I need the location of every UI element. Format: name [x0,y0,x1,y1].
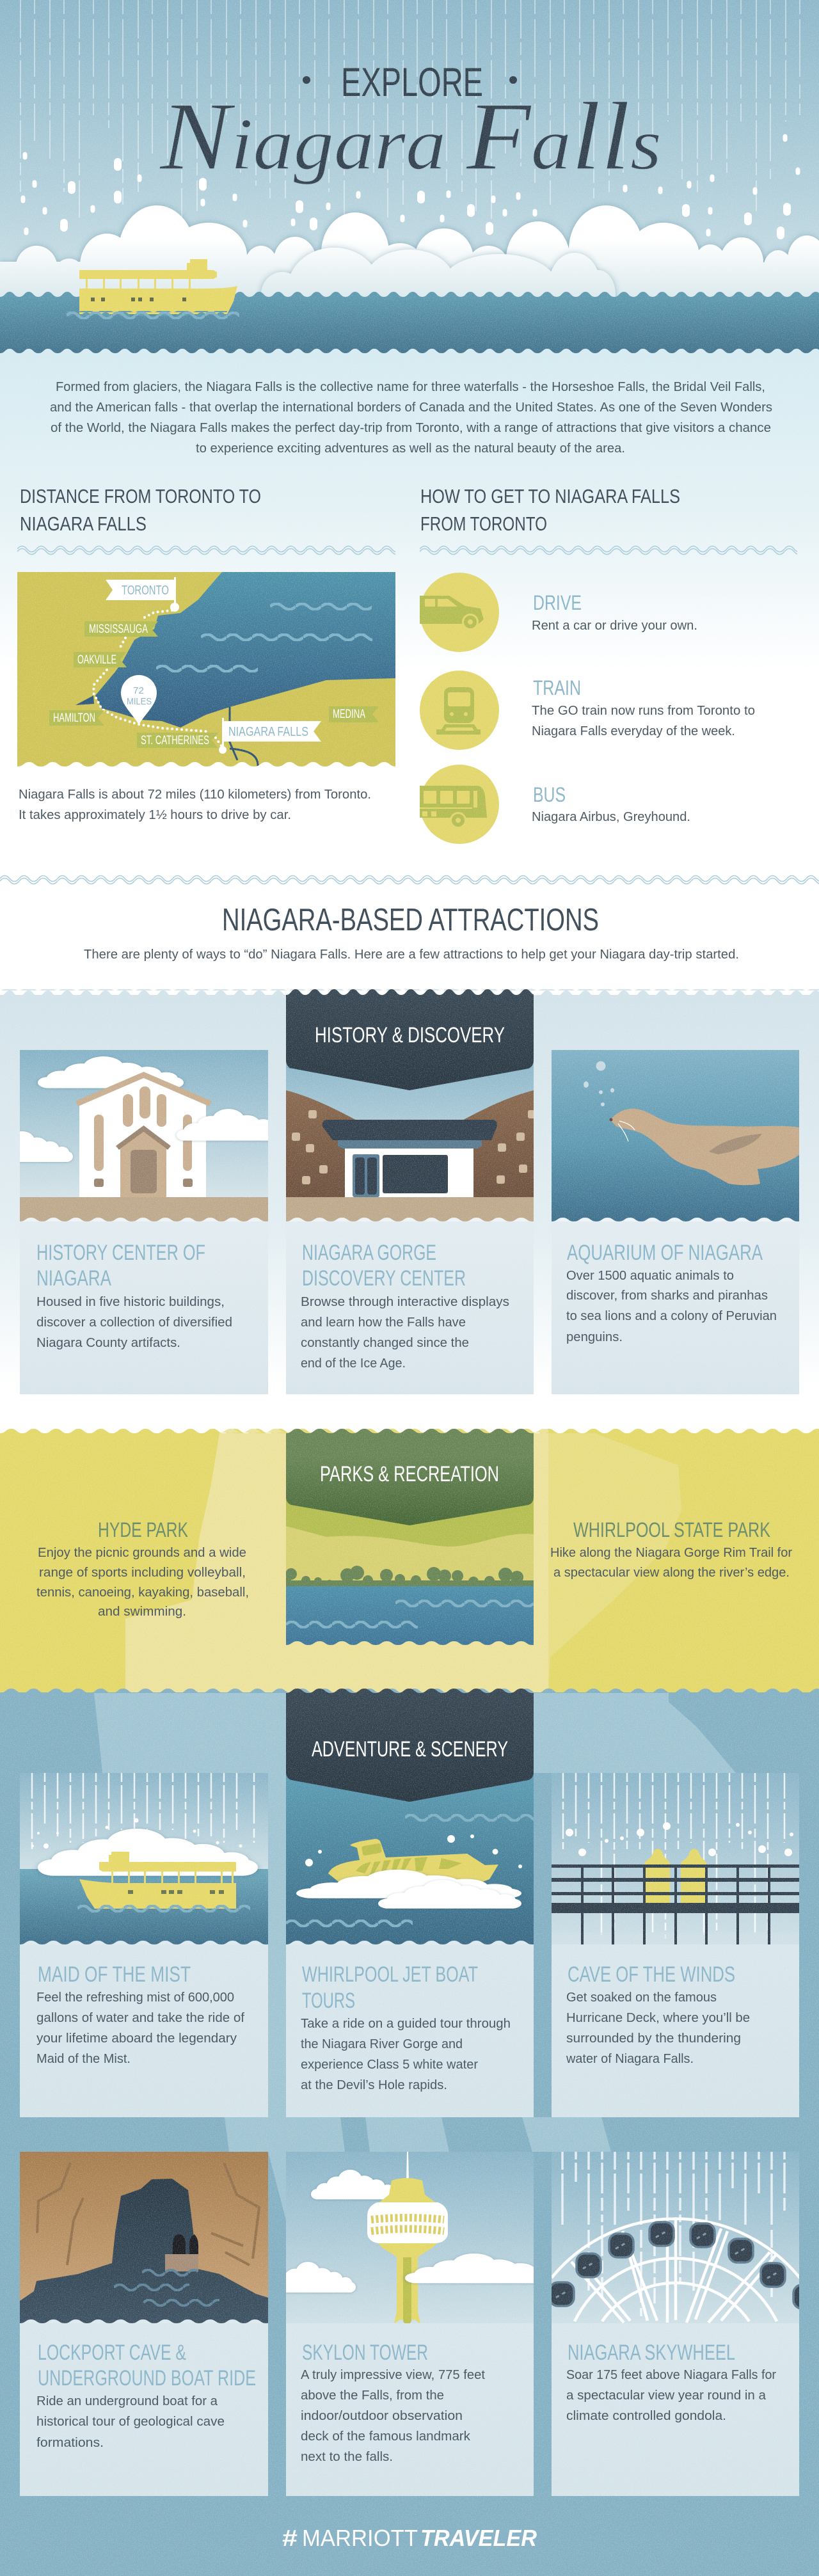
transport: train: Niagara Falls everyday of the week. [532,724,735,738]
illustration: discovery center [286,1050,536,1221]
title: Niagara Falls script: Niagara Falls [159,83,662,190]
card: Aquarium of Niagara [552,1050,799,1394]
flag: Niagara Falls [219,718,321,754]
heading: WHIRLPOOL JET BOAT [302,1962,478,1987]
description [566,1991,750,2066]
description [301,2017,511,2092]
description [36,2394,225,2450]
description: Feel the refreshing mist of 600,000 [36,1991,234,2005]
heading: Niagara-based attractions: NIAGARA-BASED ATTRACTIONS [222,903,599,937]
transport: bus: BUS [533,783,566,806]
transport: train: The GO train now runs from Toronto to [532,704,755,718]
transport: drive [420,573,697,652]
heading: how to get to Niagara Falls: HOW TO GET TO NIAGARA FALLS [420,485,680,507]
map caption [19,788,371,822]
description: penguins. [566,1330,623,1344]
description: above the Falls, from the [301,2389,444,2403]
icon: car [420,573,499,652]
description: end of the Ice Age. [301,1356,406,1371]
card: Maid of the Mist [20,1773,268,2117]
transport: train [420,671,755,750]
description: A truly impressive view, 775 feet [301,2368,485,2382]
map pin: 72 miles: 72 [133,685,144,696]
transport: train: TRAIN [533,676,581,699]
map pin: 72 miles: MILES [127,696,152,707]
icon: yellow ferry boat [67,259,239,319]
description: your lifetime aboard the legendary [36,2031,237,2046]
description: deck of the famous landmark [301,2429,471,2444]
description: the Niagara River Gorge and [301,2037,463,2051]
card: Niagara SkyWheel [550,2152,818,2496]
transport: bus [420,765,690,844]
heading: distance from Toronto: NIAGARA FALLS [20,513,147,535]
heading: distance from Toronto: DISTANCE FROM TORONTO TO [20,485,261,507]
label: St. Catherines [137,733,218,748]
description: Niagara County artifacts. [36,1336,180,1350]
text: Hyde Park: and swimming. [98,1605,186,1619]
description: Maid of the Mist. [36,2052,131,2066]
description: Over 1500 aquatic animals to [566,1269,734,1283]
illustration: ferris wheel [550,2152,818,2323]
illustration: tower [269,2152,559,2324]
heading: AQUARIUM OF NIAGARA [567,1241,763,1265]
heading: CAVE OF THE WINDS [568,1962,735,1987]
section: parks and recreation [0,1429,819,1693]
description: a spectacular view year round in a [566,2389,767,2403]
description [566,1269,777,1344]
flag: Niagara Falls: NIAGARA FALLS [228,725,308,739]
section: adventure and scenery [0,1689,819,2576]
description: and learn how the Falls have [301,1316,466,1330]
panel: route map [17,572,395,767]
card: History Center of Niagara [20,1050,268,1394]
transport: bus: Niagara Airbus, Greyhound. [532,810,690,824]
description: discover, from sharks and piranhas [566,1289,768,1303]
description: Housed in five historic buildings, [36,1295,225,1309]
clouds [0,205,819,301]
card: Whirlpool Jet Boat Tours [286,1689,534,2117]
description: to sea lions and a colony of Peruvian [566,1309,777,1323]
heading [302,1962,478,2013]
icon: train [420,671,499,750]
intro paragraph: of the World, the Niagara Falls makes the perfect day-trip from Toronto, with a range of attractions that give visitors a chance [51,421,771,435]
label: Hamilton [49,710,104,726]
illustration: maid of the mist [20,1773,268,1944]
label: St. Catherines: ST. CATHERINES [141,734,209,747]
water band [0,292,819,353]
illustration: hurricane deck [552,1773,799,1944]
label: Oakville: OAKVILLE [77,653,116,667]
footer hashtag: # [282,2525,298,2551]
banner: parks and recreation [286,1429,534,1525]
banner: adventure and scenery [286,1689,534,1802]
snow dots [23,136,798,235]
heading: SKYLON TOWER [302,2341,428,2365]
banner: history and discovery [286,989,534,1090]
heading: UNDERGROUND BOAT RIDE [38,2366,256,2390]
map caption: Niagara Falls is about 72 miles (110 kilometers) from Toronto. [19,788,371,802]
text: Hyde Park: HYDE PARK [98,1518,188,1541]
heading: HISTORY CENTER OF [36,1241,205,1265]
heading: NIAGARA [36,1266,111,1291]
description: indoor/outdoor observation [301,2409,463,2423]
banner: history and discovery: HISTORY & DISCOVERY [315,1023,505,1047]
description: next to the falls. [301,2450,393,2464]
label: Hamilton: HAMILTON [53,712,95,725]
illustration: jet boat [286,1773,534,1944]
text: Hyde Park: tennis, canoeing, kayaking, baseball, [36,1586,249,1600]
text: Whirlpool State Park [550,1518,792,1580]
description: experience Class 5 white water [301,2058,478,2072]
heading: distance from Toronto [17,485,395,555]
intro paragraph [50,380,772,456]
label: Mississauga [84,621,158,637]
text: Whirlpool State Park: a spectacular view along the river’s edge. [553,1566,790,1580]
description: constantly changed since the [301,1336,469,1350]
text: Whirlpool State Park: WHIRLPOOL STATE PARK [573,1518,770,1541]
description: Hurricane Deck, where you’ll be [566,2011,750,2025]
title: explore: EXPLORE [341,60,483,105]
description [301,1295,509,1371]
card: Niagara Gorge Discovery Center [286,989,536,1394]
map caption: It takes approximately 1½ hours to drive by car. [19,808,291,822]
description: Get soaked on the famous [566,1991,717,2005]
transport: drive: Rent a car or drive your own. [532,619,697,633]
footer hashtag: MARRIOTT [302,2525,418,2551]
description [301,2368,485,2464]
description: water of Niagara Falls. [566,2052,694,2066]
banner: adventure and scenery: ADVENTURE & SCENERY [312,1737,508,1761]
label: Mississauga: MISSISSAUGA [89,623,148,636]
flag: Toronto: TORONTO [122,584,169,598]
heading: LOCKPORT CAVE & [38,2341,186,2365]
card: Skylon Tower [269,2152,559,2496]
illustration: history center [20,1050,268,1221]
map pin: 72 miles [121,675,157,725]
description: historical tour of geological cave [36,2415,225,2429]
description [36,1991,244,2066]
heading [36,1241,205,1291]
description: surrounded by the thundering [566,2031,741,2046]
label: Medina: MEDINA [333,708,365,721]
heading: how to get to Niagara Falls [420,485,797,555]
heading: MAID OF THE MIST [38,1962,191,1987]
heading: DISCOVERY CENTER [302,1266,466,1291]
description: gallons of water and take the ride of [36,2011,244,2025]
banner: parks and recreation: PARKS & RECREATION [320,1462,499,1486]
card: Cave of the Winds [552,1773,799,2117]
header panel [0,0,819,672]
heading: TOURS [302,1989,355,2013]
text: Hyde Park: range of sports including volleyball, [39,1566,246,1580]
description: formations. [36,2436,104,2450]
heading: NIAGARA GORGE [302,1241,436,1265]
intro paragraph: Formed from glaciers, the Niagara Falls is the collective name for three waterfalls - the Horseshoe Falls, the Bridal Veil Falls, [56,380,765,394]
intro paragraph: and the American falls - that overlap the international borders of Canada and the United States. As one of the Seven Wonders [50,401,772,415]
footer hashtag [282,2525,537,2551]
icon: bus [420,765,499,844]
description: Browse through interactive displays [301,1295,509,1309]
intro paragraph: to experience exciting adventures as well as the natural beauty of the area. [196,441,625,456]
attractions intro: There are plenty of ways to “do” Niagara Falls. Here are a few attractions to help get your Niagara day-trip started. [84,948,739,962]
description: at the Devil’s Hole rapids. [301,2078,447,2092]
transport: drive: DRIVE [533,591,582,614]
text: Hyde Park [36,1518,249,1619]
card: Lockport Cave [20,2152,268,2496]
heading [38,2341,256,2390]
section: history and discovery [0,989,819,1430]
description: climate controlled gondola. [566,2409,726,2423]
description [36,1295,232,1350]
footer hashtag: TRAVELER [420,2525,537,2551]
heading [302,1241,466,1291]
heading: NIAGARA SKYWHEEL [568,2341,735,2365]
flag: Toronto [106,577,179,612]
description: Soar 175 feet above Niagara Falls for [566,2368,776,2382]
illustration: cave [20,2152,268,2323]
illustration: sea lion [552,1050,799,1221]
illustration: park landscape [285,1497,534,1645]
text: Whirlpool State Park: Hike along the Niagara Gorge Rim Trail for [550,1546,792,1560]
description: Take a ride on a guided tour through [301,2017,511,2031]
lake [95,572,395,727]
heading: how to get to Niagara Falls: FROM TORONTO [420,513,547,535]
description: Ride an underground boat for a [36,2394,218,2408]
description [566,2368,776,2423]
description: discover a collection of diversified [36,1316,232,1330]
text: Hyde Park: Enjoy the picnic grounds and a wide [38,1546,246,1560]
